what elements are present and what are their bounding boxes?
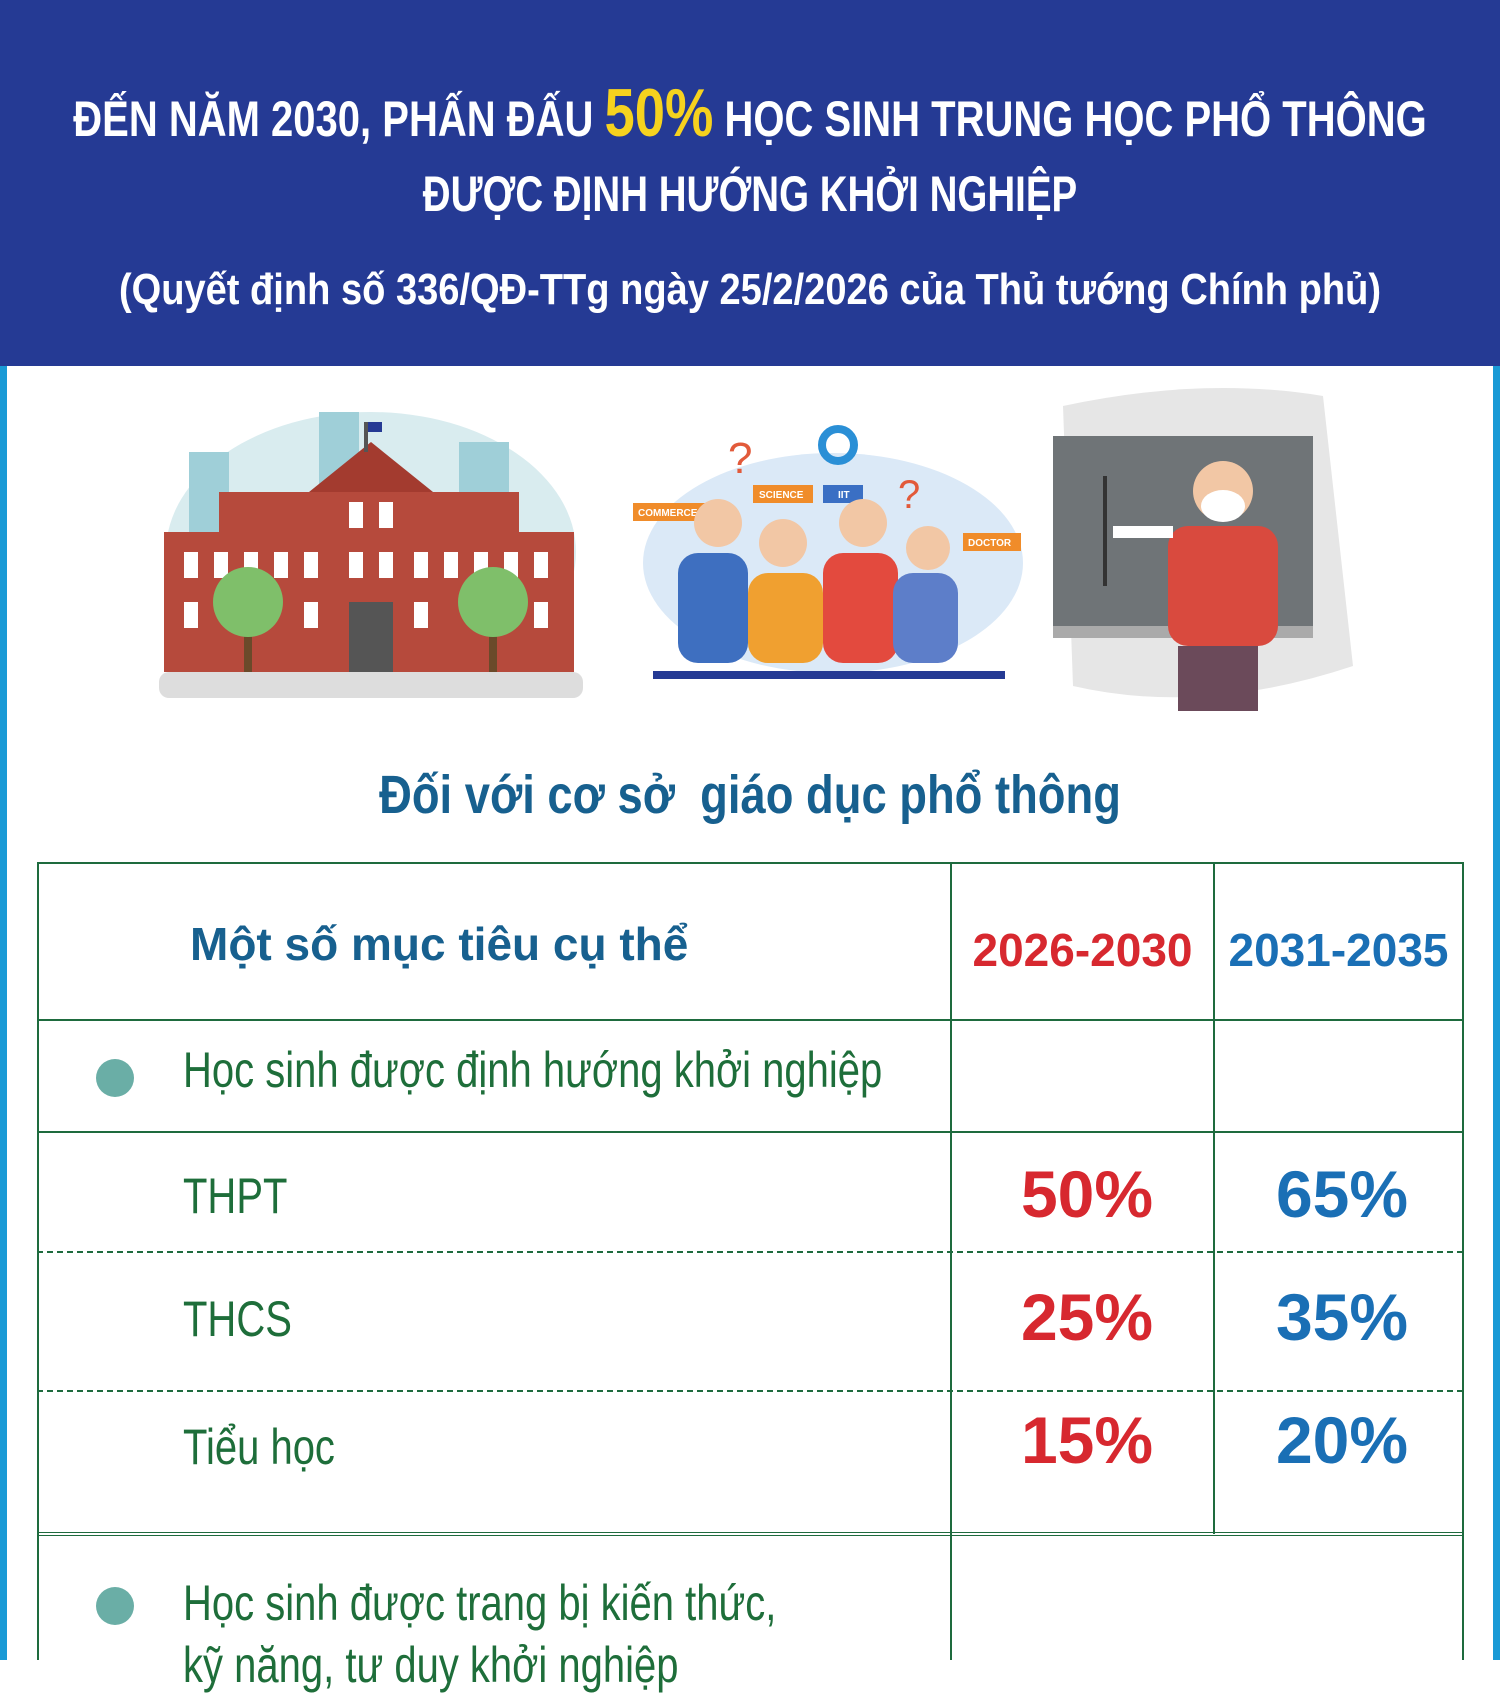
row Tieu hoc: Tiểu học bbox=[183, 1419, 335, 1475]
row: skills bbox=[96, 1587, 134, 1625]
row: students oriented bbox=[96, 1059, 134, 1097]
table: 65% bbox=[1276, 1157, 1408, 1231]
table: 25% bbox=[1021, 1280, 1153, 1354]
header: 2031-2035: 2031-2035 bbox=[1228, 924, 1448, 976]
side bar right bbox=[1493, 0, 1500, 1660]
illustration: teacher bbox=[1053, 388, 1353, 711]
header banner bbox=[0, 0, 1500, 366]
row THPT: THPT bbox=[183, 1168, 287, 1224]
illustration: students: DOCTOR bbox=[968, 538, 1012, 549]
illustration: students: COMMERCE bbox=[638, 508, 698, 519]
illustration: students: IIT bbox=[838, 490, 850, 501]
table: 15% bbox=[1021, 1403, 1153, 1477]
illustration: students: ? bbox=[898, 473, 920, 517]
text: kỹ năng, tư duy khởi nghiệp bbox=[183, 1637, 679, 1693]
header: 2026-2030: 2026-2030 bbox=[972, 924, 1192, 976]
title line 1: ĐẾN NĂM 2030, PHẤN ĐẤU 50% HỌC SINH TRUNG HỌC PHỔ THÔNG bbox=[73, 75, 1427, 151]
illustration: students bbox=[633, 425, 1023, 679]
table: Học sinh được định hướng khởi nghiệp bbox=[183, 1042, 882, 1098]
table: 50% bbox=[1021, 1157, 1153, 1231]
illustration: students: ? bbox=[728, 434, 752, 483]
subtitle decision: (Quyết định số 336/QĐ-TTg ngày 25/2/2026 của Thủ tướng Chính phủ) bbox=[119, 265, 1381, 314]
title line 2: ĐƯỢC ĐỊNH HƯỚNG KHỞI NGHIỆP bbox=[423, 166, 1077, 222]
table: 35% bbox=[1276, 1280, 1408, 1354]
section heading: Đối với cơ sở giáo dục phổ thông bbox=[379, 765, 1121, 825]
row THCS: THCS bbox=[183, 1291, 292, 1347]
header: objectives: Một số mục tiêu cụ thể bbox=[190, 918, 688, 970]
illustration: school building bbox=[159, 412, 583, 698]
side bar left bbox=[0, 0, 7, 1660]
table: Học sinh được trang bị kiến thức, bbox=[183, 1575, 776, 1631]
table bbox=[37, 862, 1464, 1693]
illustration: students: SCIENCE bbox=[759, 490, 804, 501]
table: 20% bbox=[1276, 1403, 1408, 1477]
